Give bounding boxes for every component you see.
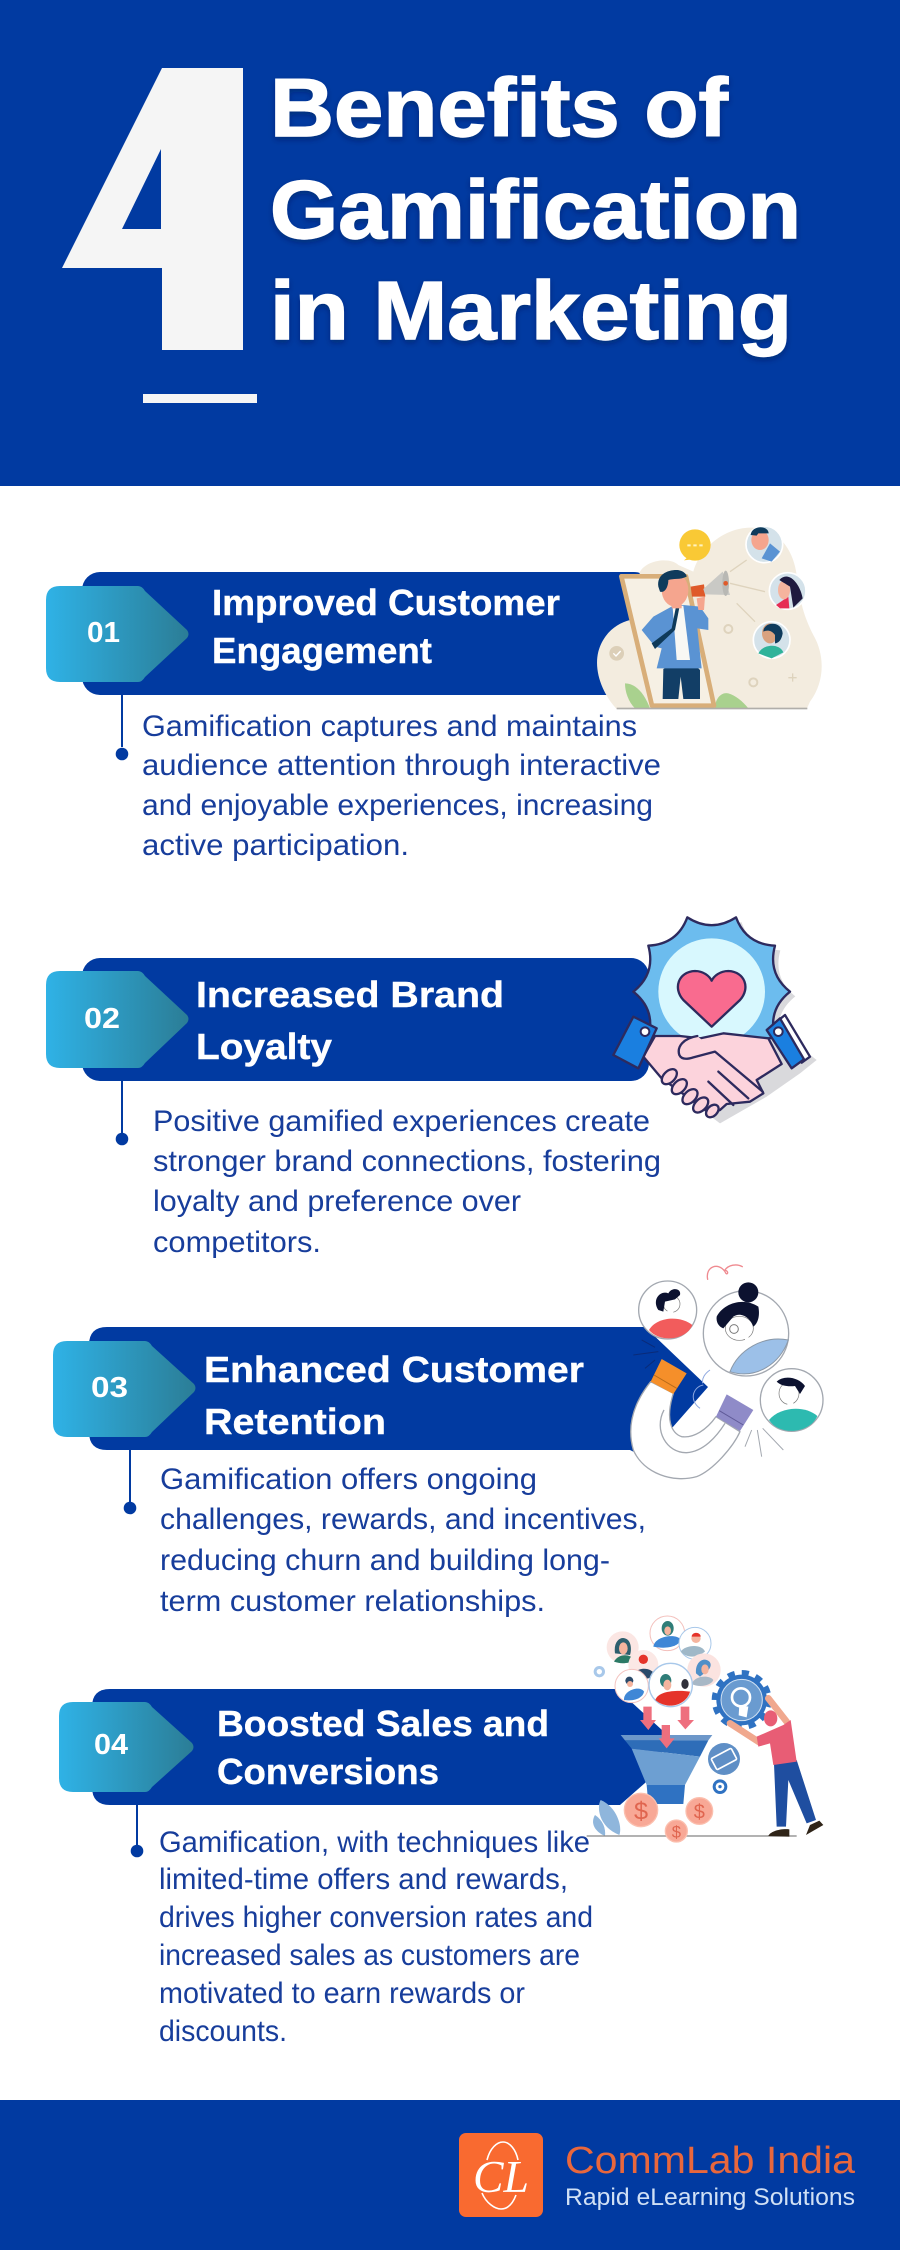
panel: benefit 02	[46, 917, 817, 1259]
connector 04	[131, 1805, 143, 1857]
heading 02: Increased Brand	[196, 974, 504, 1015]
body text 04: motivated to earn rewards or	[159, 1977, 525, 2010]
body text 02: loyalty and preference over	[153, 1185, 521, 1218]
tagline: Rapid eLearning Solutions	[565, 2184, 855, 2211]
title: in Marketing	[270, 264, 792, 357]
body text 01: Gamification captures and maintains	[142, 710, 637, 743]
heading bar 04	[92, 1689, 662, 1805]
body text 03: Gamification offers ongoing	[160, 1463, 537, 1496]
body text 01: active participation.	[142, 829, 409, 862]
number badge 02: 02	[84, 1003, 120, 1035]
heading 02: Loyalty	[196, 1026, 332, 1067]
body text 04	[159, 1826, 593, 2048]
company name: CommLab India	[565, 2140, 856, 2182]
body text 01: audience attention through interactive	[142, 749, 661, 782]
number badge 01: 01	[87, 617, 120, 649]
body text 04: limited-time offers and rewards,	[159, 1863, 568, 1896]
heading bar 02	[82, 958, 649, 1081]
illustration: sales funnel and gear	[587, 1616, 823, 1842]
header underline	[143, 394, 257, 403]
heading 04: Boosted Sales and	[217, 1703, 549, 1744]
heading 01: Improved Customer	[212, 582, 560, 623]
illustration: man with megaphone	[597, 526, 822, 709]
connector 02	[116, 1081, 128, 1145]
panel: header	[0, 0, 900, 486]
body text 03: reducing churn and building long-	[160, 1544, 610, 1577]
illustration: heart badge and handshake	[613, 917, 817, 1123]
heading 02	[196, 974, 504, 1067]
illustration: sales funnel and gear: $	[634, 1797, 648, 1825]
body text 03	[160, 1463, 646, 1618]
heading 04	[217, 1703, 549, 1792]
body text 04: drives higher conversion rates and	[159, 1901, 593, 1934]
heading 03	[204, 1349, 584, 1442]
body text 03: challenges, rewards, and incentives,	[160, 1503, 646, 1536]
heading 01: Engagement	[212, 630, 432, 671]
panel: footer	[0, 2100, 900, 2250]
heading 03: Retention	[204, 1401, 386, 1442]
body text 01	[142, 710, 661, 862]
panel: benefit 04	[59, 1616, 823, 2048]
body text 03: term customer relationships.	[160, 1585, 545, 1618]
body text 01: and enjoyable experiences, increasing	[142, 789, 653, 822]
connector 03	[124, 1450, 136, 1514]
heading 04: Conversions	[217, 1751, 439, 1792]
illustration: sales funnel and gear: $	[694, 1801, 705, 1823]
body text 04: increased sales as customers are	[159, 1939, 580, 1972]
big numeral 4	[62, 68, 243, 350]
body text 02	[153, 1105, 661, 1259]
body text 02: competitors.	[153, 1226, 321, 1259]
heading bar 01	[82, 572, 652, 695]
body text 02: stronger brand connections, fostering	[153, 1145, 661, 1178]
body text 04: discounts.	[159, 2015, 287, 2048]
title	[270, 61, 801, 357]
body text 04: Gamification, with techniques like	[159, 1826, 590, 1859]
title: Benefits of	[270, 61, 728, 154]
heading 03: Enhanced Customer	[204, 1349, 584, 1390]
number badge 04	[59, 1702, 194, 1792]
number badge 03: 03	[91, 1372, 128, 1404]
number badge 02	[46, 971, 188, 1068]
title: Gamification	[270, 163, 801, 256]
connector 01	[116, 695, 128, 760]
panel: benefit 03	[53, 1265, 823, 1618]
icon: CommLab logo mark: CL	[473, 2151, 529, 2202]
heading bar 03	[89, 1327, 708, 1460]
number badge 03	[53, 1341, 196, 1437]
body text 02: Positive gamified experiences create	[153, 1105, 650, 1138]
number badge 01	[46, 586, 188, 682]
illustration: magnet attracting people	[631, 1265, 823, 1479]
illustration: sales funnel and gear: $	[672, 1822, 681, 1841]
heading 01	[212, 582, 560, 671]
number badge 04: 04	[94, 1729, 128, 1761]
panel: benefit 01	[46, 526, 822, 862]
icon: CommLab logo mark	[459, 2133, 543, 2217]
